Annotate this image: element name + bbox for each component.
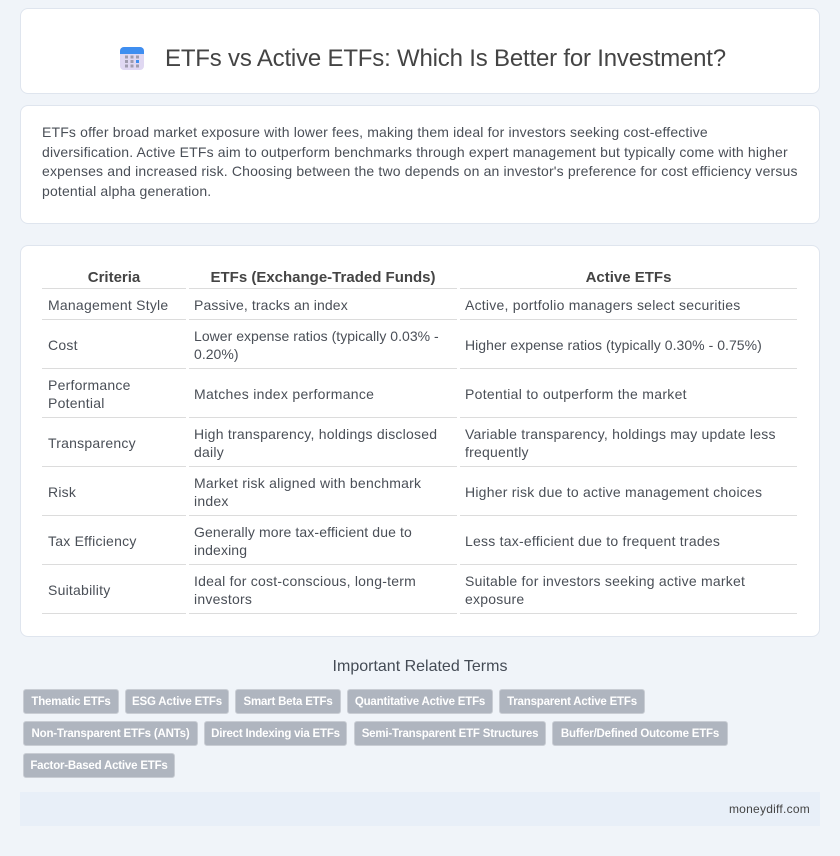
row: cost: Higher expense ratios (typically 0.30% - 0.75%) — [465, 337, 762, 353]
tag — [354, 721, 546, 746]
table headings — [88, 269, 671, 286]
tag — [125, 689, 229, 714]
row: suitability: Suitability — [48, 582, 110, 598]
header card — [20, 8, 820, 94]
row: performance potential: Potential — [48, 395, 105, 411]
row: performance potential: Potential to outperform the market — [465, 386, 687, 402]
tag: Buffer/Defined Outcome ETFs — [561, 728, 719, 740]
tag — [552, 721, 728, 746]
table headings: Criteria — [88, 269, 140, 286]
footer bar — [20, 792, 820, 826]
intro text: ETFs offer broad market exposure with lower fees, making them ideal for investors seeking cost-effective — [42, 124, 708, 140]
row: risk — [48, 475, 762, 509]
tag — [235, 689, 341, 714]
tag: Transparent Active ETFs — [507, 696, 637, 708]
row: transparency: Transparency — [48, 435, 136, 451]
row: transparency: Variable transparency, holdings may update less — [465, 426, 776, 442]
tag: Semi-Transparent ETF Structures — [362, 728, 538, 740]
row: transparency — [48, 426, 776, 460]
row: tax efficiency: Generally more tax-efficient due to — [194, 524, 412, 540]
intro text — [42, 124, 798, 199]
related terms tags — [23, 689, 728, 778]
row: cost: 0.20%) — [194, 346, 239, 362]
row: risk: Market risk aligned with benchmark — [194, 475, 421, 491]
intro text: potential alpha generation. — [42, 183, 211, 199]
row: management style — [48, 297, 740, 313]
intro text: diversification. Active ETFs aim to outperform benchmarks through expert management but typically come with higher — [42, 144, 788, 160]
row: cost — [48, 328, 762, 362]
tag: Quantitative Active ETFs — [355, 696, 485, 708]
row: transparency: High transparency, holdings disclosed — [194, 426, 437, 442]
row: suitability: Ideal for cost-conscious, long-term — [194, 573, 416, 589]
related terms heading: Important Related Terms — [333, 658, 507, 675]
row: suitability: investors — [194, 591, 252, 607]
intro text: expenses and increased risk. Choosing between the two depends on an investor's preference for cost efficiency versus — [42, 163, 798, 179]
title: ETFs vs Active ETFs: Which Is Better for Investment? — [165, 45, 726, 72]
row: suitability — [48, 573, 745, 607]
row: management style: Management Style — [48, 297, 168, 313]
tag — [204, 721, 347, 746]
row: tax efficiency: indexing — [194, 542, 247, 558]
row: performance potential: Matches index performance — [194, 386, 374, 402]
tag: Non-Transparent ETFs (ANTs) — [32, 728, 189, 740]
table headings: Active ETFs — [586, 269, 671, 286]
row: tax efficiency — [48, 524, 720, 558]
intro card — [20, 105, 820, 224]
row: cost: Cost — [48, 337, 78, 353]
row: performance potential — [48, 377, 687, 411]
row: suitability: Suitable for investors seeking active market — [465, 573, 745, 589]
row: tax efficiency: Tax Efficiency — [48, 533, 137, 549]
tag: Direct Indexing via ETFs — [211, 728, 340, 740]
row: management style: Passive, tracks an index — [194, 297, 348, 313]
icon: calendar — [120, 47, 144, 70]
tag — [23, 721, 198, 746]
tag: ESG Active ETFs — [132, 696, 222, 708]
row: tax efficiency: Less tax-efficient due to frequent trades — [465, 533, 720, 549]
tag: Factor-Based Active ETFs — [30, 760, 168, 772]
tag — [499, 689, 645, 714]
row: risk: index — [194, 493, 229, 509]
row: suitability: exposure — [465, 591, 524, 607]
row: cost: Lower expense ratios (typically 0.03% - — [194, 328, 439, 344]
row: transparency: frequently — [465, 444, 529, 460]
tag — [23, 753, 175, 778]
tag — [23, 689, 119, 714]
tag: Smart Beta ETFs — [243, 696, 333, 708]
row: transparency: daily — [194, 444, 224, 460]
table headings: ETFs (Exchange-Traded Funds) — [210, 269, 436, 286]
row: risk: Risk — [48, 484, 76, 500]
row: management style: Active, portfolio managers select securities — [465, 297, 740, 313]
footer credit: moneydiff.com — [729, 802, 810, 816]
tag — [347, 689, 493, 714]
row: performance potential: Performance — [48, 377, 131, 393]
row: risk: Higher risk due to active management choices — [465, 484, 762, 500]
tag: Thematic ETFs — [31, 696, 111, 708]
comparison table card — [20, 245, 820, 637]
